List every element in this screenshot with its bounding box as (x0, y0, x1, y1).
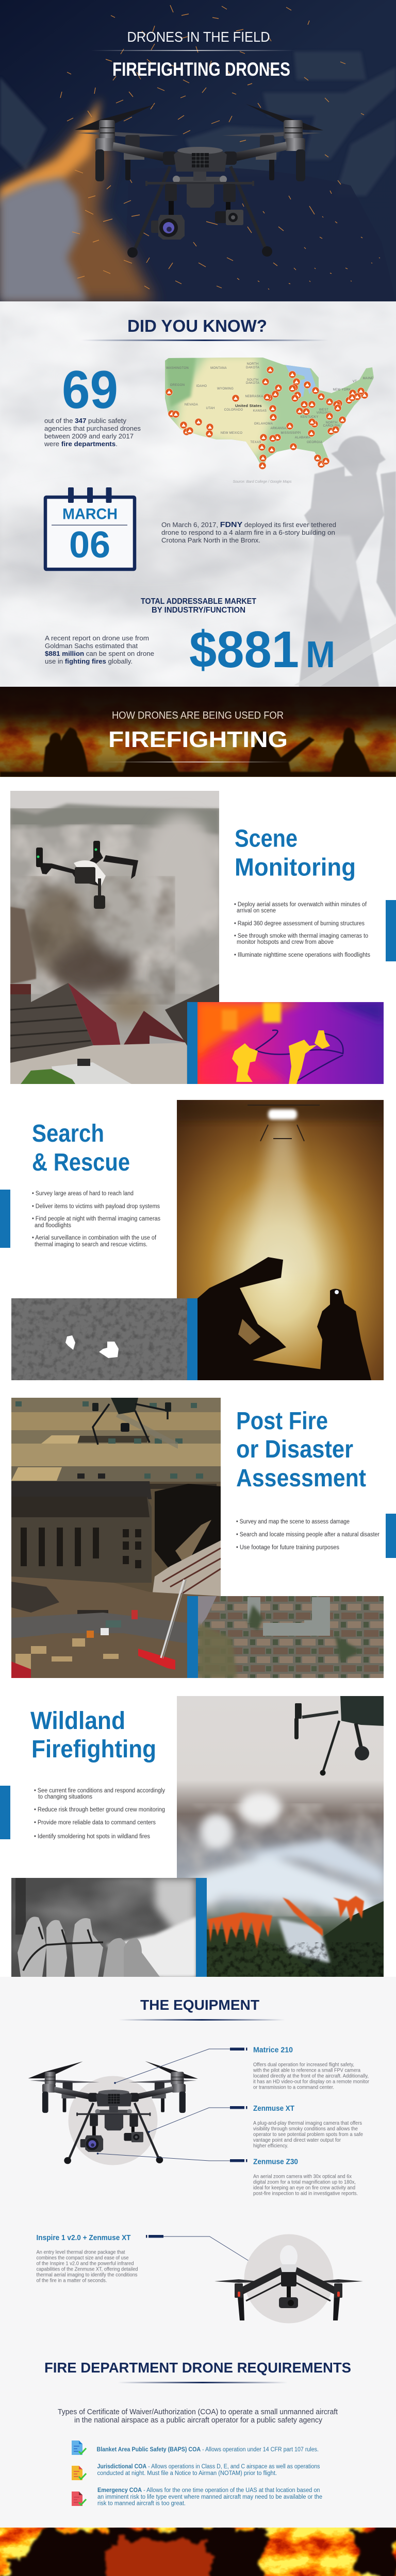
drone with floodlight (248, 1105, 320, 1141)
text: Goldman Sachs estimate: Goldman Sachs estimated that (45, 642, 138, 650)
panel: did you know (0, 301, 396, 687)
blue tab (0, 1190, 10, 1248)
item: blanket area public safety COA: Blanket Area Public Safety (BAPS) COA - Allows operation under 14 CFR part 107 rules. (97, 2447, 319, 2453)
stat: 69 fire departments (44, 360, 141, 448)
callout: Matrice 210: Offers dual operation for increased flight safety, (253, 2062, 354, 2068)
callout: Inspire 1 v2.0 + Zenmuse XT: Inspire 1 v2.0 + Zenmuse XT (36, 2233, 131, 2242)
callout: Zenmuse Z30: ideal for keeping an eye on fire crew activity and (253, 2185, 355, 2191)
bullets: wildland: • Provide more reliable data to command centers (34, 1820, 156, 1826)
state labels: NEBRASKA (245, 395, 263, 398)
drone over smoke (36, 841, 138, 909)
stat: $881M: M (306, 634, 335, 675)
bullets: search and rescue: • Deliver items to victims with payload drop systems (32, 1204, 160, 1210)
state labels: COLORADO (224, 409, 243, 412)
roofs (10, 907, 219, 1084)
heading: did you know: DID YOU KNOW? (127, 316, 267, 335)
background fire truck shapes (0, 52, 396, 196)
bullets: scene monitoring: • Deploy aerial assets for overwatch within minutes of (234, 902, 367, 908)
bullets: post fire: • Use footage for future training purposes (236, 1545, 339, 1551)
burned building (11, 1481, 152, 1499)
bullets: wildland: to changing situations (38, 1794, 92, 1800)
heading: search and rescue: & Rescue (32, 1149, 130, 1176)
burning forest (207, 1929, 322, 1977)
banner: how drones are used: HOW DRONES ARE BEING USED FOR (112, 710, 284, 721)
callout: Inspire 1 v2.0 + Zenmuse XT: capabilities of the Zenmuse XT, offering detailed (36, 2267, 138, 2272)
panel: fire department drone requirements: FIRE DEPARTMENT DRONE REQUIREMENTS (44, 2360, 351, 2376)
fire glow (0, 118, 155, 301)
item: blanket area public safety COA (72, 2441, 319, 2455)
hero title: FIREFIGHTING DRONES (112, 59, 290, 80)
item: emergency COA: an imminent risk to life type event where manned aircraft may need to be available or the (97, 2494, 322, 2500)
panel: wildland photo (177, 1696, 384, 1977)
callout: Zenmuse XT: vantage point and direct water output for (253, 2138, 341, 2143)
bullets: wildland: • Reduce risk through better ground crew monitoring (34, 1807, 165, 1813)
calendar: March 06: 06 (69, 524, 110, 566)
text: Goldman Sachs estimate: use in fighting fires globally. (45, 658, 133, 665)
bullets: search and rescue: • Find people at night with thermal imaging cameras (32, 1216, 160, 1222)
stat: 69 fire departments: 69 (62, 360, 118, 420)
text: Goldman Sachs estimate: A recent report on drone use from (45, 635, 149, 642)
callout: Matrice 210 (114, 2045, 370, 2091)
item: jurisdictional COA: Jurisdictional COA - Allows operations in Class D, E, and C airspace as well as operations (97, 2464, 320, 2470)
state labels (166, 363, 373, 444)
state labels: NORTH (326, 421, 337, 425)
state labels: SOUTH (247, 379, 258, 382)
map of US fire department drones: Source: Bard College / Google Maps (233, 480, 292, 484)
heading: search and rescue (32, 1120, 130, 1176)
state labels: UTAH (206, 407, 215, 410)
callout: Matrice 210: Matrice 210 (253, 2045, 293, 2055)
state labels: ALABAMA (295, 436, 310, 439)
callout: Zenmuse Z30: post-fire inspection to aid in investigative reports. (253, 2191, 358, 2197)
overhead drone (92, 1398, 171, 1445)
text: Goldman Sachs estimate (45, 635, 154, 665)
state labels: ARKANSAS (270, 427, 289, 430)
callout: Inspire 1 v2.0 + Zenmuse XT: of the fire in a matter of seconds. (36, 2278, 107, 2283)
crew (18, 1917, 160, 1977)
hero divider (91, 50, 295, 51)
callout: Zenmuse Z30: digital zoom for a total magnification up to 180x, (253, 2179, 356, 2185)
state labels: VT (353, 380, 357, 383)
panel: firefighter and flames photo (0, 2528, 396, 2576)
callout: Matrice 210: with the pilot able to reference a small FPV camera (253, 2068, 360, 2073)
thermal figures (232, 1030, 330, 1084)
state labels: OKLAHOMA (254, 422, 273, 426)
banner: how drones are used (0, 687, 396, 777)
bullets: scene monitoring: monitor hotspots and crew from above (237, 939, 334, 945)
callout: Zenmuse XT: operator to see potential problem spots from a safe (253, 2132, 363, 2138)
state labels: WYOMING (217, 387, 234, 391)
state labels: DAKOTA (246, 366, 259, 369)
text: Goldman Sachs estimate: $881 million can be spent on drone (45, 650, 154, 657)
intro text: in the national airspace as a public aircraft operator for a public safety agency (74, 2416, 323, 2425)
heading: search and rescue: Search (32, 1120, 104, 1147)
stat: 69 fire departments: agencies that purchased drones (44, 425, 141, 432)
callout: Zenmuse Z30: An aerial zoom camera with 30x optical and 6x (253, 2174, 352, 2179)
heading: post fire: or Disaster (236, 1436, 353, 1463)
calendar: March 06: MARCH (62, 506, 118, 522)
heading: total addressable market (141, 597, 256, 615)
heading: total addressable market: TOTAL ADDRESSABLE MARKET (141, 597, 256, 606)
heading: wildland firefighting: Wildland (30, 1707, 125, 1735)
state labels: MISSISSIPPI (281, 432, 301, 435)
bullets: scene monitoring: • See through smoke with thermal imaging cameras to (234, 933, 368, 939)
state labels: DAKOTA (246, 382, 259, 385)
bullets: search and rescue (32, 1191, 160, 1248)
item: emergency COA (72, 2487, 322, 2507)
callout: Zenmuse Z30 (97, 2153, 358, 2197)
heading: post fire: Post Fire (236, 1408, 328, 1435)
sparks (60, 5, 380, 290)
black smoke (0, 2528, 396, 2576)
heading: post fire (236, 1408, 366, 1492)
calendar: March 06 (45, 487, 135, 569)
state labels: KANSAS (253, 410, 267, 413)
rescuers in silhouette (197, 1257, 371, 1380)
heading: scene monitoring (235, 825, 356, 881)
stat: 69 fire departments: out of the 347 public safety (44, 417, 127, 425)
hero panel (0, 0, 396, 301)
state labels: VIRGINIA (317, 412, 331, 415)
intro text (58, 2408, 338, 2425)
bullets: search and rescue: • Survey large areas of hard to reach land (32, 1191, 134, 1197)
bullets: scene monitoring: • Rapid 360 degree assessment of burning structures (234, 921, 365, 927)
stat: $881M: $881 (189, 621, 299, 679)
state labels: United States (235, 403, 262, 408)
heading: total addressable market: BY INDUSTRY/FUNCTION (152, 606, 245, 615)
panel: fire department drone requirements (44, 2360, 351, 2507)
bullets: search and rescue: and floodlights (35, 1223, 71, 1229)
item: jurisdictional COA (72, 2464, 320, 2480)
callout: Zenmuse XT: A plug-and-play thermal imaging camera that offers (253, 2121, 362, 2126)
callout: Zenmuse Z30: Zenmuse Z30 (253, 2158, 298, 2166)
item: emergency COA: risk to manned aircraft is too great. (97, 2501, 186, 2507)
text: FDNY tethered drone (161, 520, 336, 544)
callout: Inspire 1 v2.0 + Zenmuse XT: of the Inspire 1 v2.0 and the powerful infrared (36, 2261, 134, 2267)
bullets: scene monitoring: arrival on scene (237, 908, 276, 914)
firefighter silhouette (299, 436, 396, 687)
callout: Matrice 210: located directly at the front of the aircraft. Additionally, (253, 2073, 369, 2079)
heading: scene monitoring: Monitoring (235, 854, 356, 881)
banner: how drones are used: FIREFIGHTING (108, 727, 288, 752)
ground (11, 1577, 221, 1678)
state labels: GEORGIA (307, 441, 322, 444)
state labels: CAROLINA (323, 425, 340, 428)
heading: post fire: Assessment (236, 1465, 366, 1492)
heading: scene monitoring: Scene (235, 825, 298, 852)
state labels: IDAHO (196, 385, 207, 388)
stat: 69 fire departments: between 2009 and early 2017 (44, 433, 134, 440)
heading: wildland firefighting: Firefighting (31, 1736, 156, 1763)
collapsed section (155, 1484, 221, 1577)
callout: Inspire 1 v2.0 + Zenmuse XT: An entry level thermal drone package that (36, 2249, 125, 2256)
map of US fire department drones (160, 355, 376, 484)
stat: 69 fire departments: were fire departments . (44, 440, 118, 448)
item: emergency COA: Emergency COA - Allows for the one time operation of the UAS at that location based on (97, 2487, 320, 2494)
panel: the equipment (0, 1977, 396, 2528)
heading: THE EQUIPMENT (140, 1997, 259, 2013)
panel: scene monitoring photo (10, 791, 219, 1084)
smoke plume (0, 178, 88, 301)
bullets: post fire: • Survey and map the scene to assess damage (236, 1519, 350, 1525)
intro text: Types of Certificate of Waiver/Authorization (COA) to operate a small unmanned aircraft (58, 2408, 338, 2416)
bullets: wildland (34, 1788, 165, 1840)
bullets: wildland: • Identify smoldering hot spots in wildland fires (34, 1834, 150, 1840)
state labels: NEVADA (185, 403, 198, 406)
bullets: wildland: • See current fire conditions and respond accordingly (34, 1788, 165, 1794)
callout: Zenmuse XT (148, 2104, 363, 2149)
state labels: WEST (319, 409, 328, 412)
panel: flooded neighbourhood aerial (187, 1596, 384, 1678)
state labels: NORTH (247, 363, 258, 366)
drone: Inspire 1 (214, 2234, 363, 2324)
panel: post fire photo (11, 1398, 221, 1678)
blue tab (0, 1786, 10, 1839)
bullets: search and rescue: thermal imaging to search and rescue victims. (35, 1242, 147, 1248)
hero kicker: DRONES IN THE FIELD (127, 29, 270, 45)
state labels: MONTANA (210, 367, 227, 370)
callout: Zenmuse XT: visibility through smoky conditions and allows the (253, 2126, 358, 2132)
panel: foam crew black and white photo (11, 1878, 207, 1977)
callout: Zenmuse XT: Zenmuse XT (253, 2104, 294, 2113)
heading: wildland firefighting (30, 1707, 156, 1763)
panel: search and rescue photo (177, 1100, 384, 1380)
text: FDNY tethered drone: On March 6, 2017, FDNY deployed its first ever tethered (161, 520, 336, 529)
state labels: NEW YORK (333, 388, 351, 392)
callout: Matrice 210: it has an HD video-out for display on a remote monitor (253, 2079, 370, 2084)
blue tab (386, 900, 396, 961)
fire truck and ladder (138, 1649, 175, 1670)
state labels: MAINE (363, 377, 373, 380)
firefighter silhouettes (0, 727, 396, 777)
drone: Matrice 210 with payloads (28, 2061, 198, 2165)
callout: Inspire 1 v2.0 + Zenmuse XT: thermal aerial imaging to identify the conditions (36, 2272, 137, 2278)
callout: Inspire 1 v2.0 + Zenmuse XT: combines the compact size and ease of use (36, 2256, 129, 2261)
map markers (166, 366, 368, 469)
state labels: KENTUCKY (300, 416, 319, 419)
state labels: WASHINGTON (166, 367, 189, 370)
overhead drone (294, 1696, 384, 1775)
panel: grey thermal image (11, 1298, 197, 1380)
text: FDNY tethered drone: drone to respond to a 4 alarm fire in a 6-story building on (161, 529, 335, 536)
bullets: post fire: • Search and locate missing people after a natural disaster (236, 1532, 380, 1538)
text: FDNY tethered drone: Crotona Park North in the Bronx. (161, 537, 260, 544)
blue tab (386, 1514, 396, 1558)
callout: Zenmuse XT: higher efficiency. (253, 2143, 288, 2149)
bullets: post fire (236, 1519, 380, 1551)
state labels: NEW MEXICO (221, 432, 242, 435)
callout: Inspire 1 v2.0 + Zenmuse XT (36, 2233, 260, 2283)
drone (75, 104, 323, 258)
panel: thermal image (187, 1002, 384, 1084)
item: jurisdictional COA: conducted at night. Must file a Notice to Airman (NOTAM) prior to flight. (97, 2470, 277, 2477)
state labels: TEXAS (250, 441, 261, 444)
bullets: scene monitoring (234, 902, 370, 958)
bullets: scene monitoring: • Illuminate nighttime scene operations with floodlights (234, 952, 370, 958)
state labels: OREGON (170, 384, 185, 387)
bullets: search and rescue: • Aerial surveillance in combination with the use of (32, 1235, 157, 1241)
callout: Matrice 210: or transmission to a command center. (253, 2084, 334, 2091)
